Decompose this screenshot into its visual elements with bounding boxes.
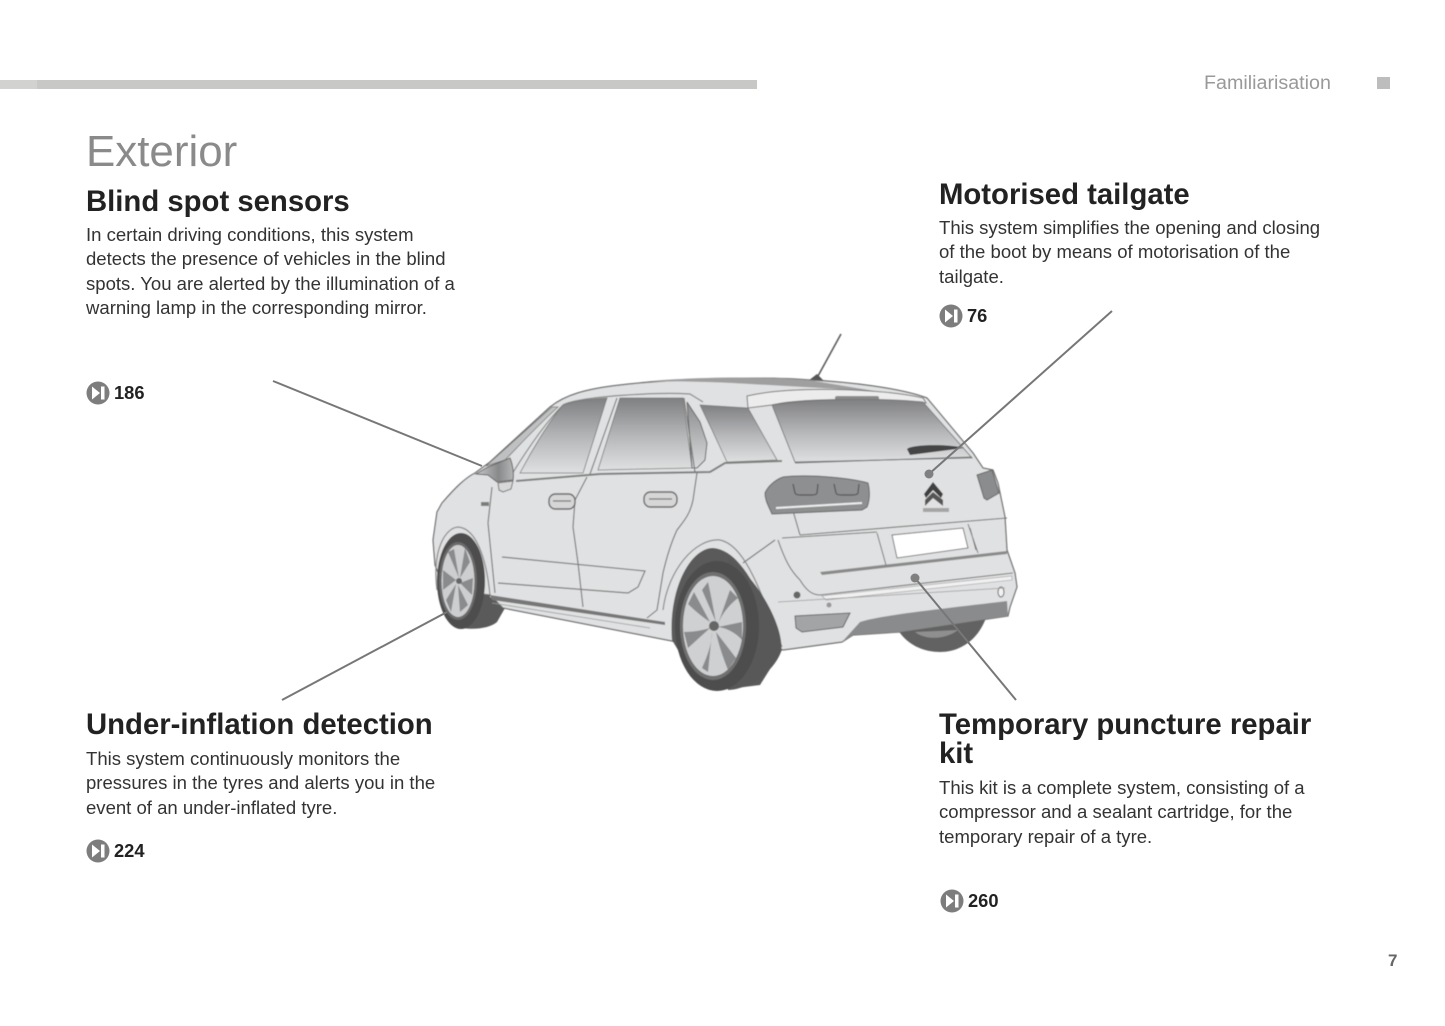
number plate	[892, 528, 968, 558]
text block: warning lamp in the corresponding mirror.	[86, 297, 427, 318]
text block	[939, 777, 1305, 847]
tailgate lines	[778, 457, 1013, 595]
front door window	[520, 398, 607, 473]
chrome strip	[820, 551, 1007, 575]
antenna	[818, 334, 841, 376]
text block: In certain driving conditions, this system	[86, 224, 414, 245]
text block: tailgate.	[939, 266, 1004, 287]
reflector	[795, 613, 850, 632]
sill strip	[490, 595, 665, 625]
far rear wheel	[898, 610, 988, 652]
car	[433, 334, 1017, 691]
heading: Motorised tailgate	[939, 178, 1190, 211]
citroen emblem	[924, 482, 943, 506]
text block: This system simplifies the opening and closing	[939, 217, 1320, 238]
belt line	[516, 461, 782, 481]
rear door window	[598, 398, 692, 470]
heading: Under-inflation detection	[86, 708, 433, 741]
page reference 76: 76	[967, 305, 987, 326]
panel: motorised tailgate	[939, 178, 1320, 328]
text block: detects the presence of vehicles in the blind	[86, 248, 446, 269]
panel: under-inflation detection	[86, 708, 435, 862]
rear tyre	[728, 558, 781, 690]
lower bumper	[842, 601, 1008, 642]
header bar	[0, 80, 757, 89]
bumper line	[778, 588, 1005, 602]
section label: Familiarisation	[1204, 72, 1331, 94]
roof highlight	[640, 378, 875, 391]
heading	[939, 708, 1311, 770]
left tail lamp	[765, 476, 869, 514]
right tail lamp	[977, 470, 999, 500]
page reference 224: 224	[114, 840, 145, 861]
car body	[433, 378, 1017, 650]
side rear window	[700, 405, 777, 462]
leader line: motorised tailgate	[924, 311, 1112, 478]
leader line: puncture repair kit	[910, 574, 1016, 700]
parking sensors	[794, 592, 800, 598]
spoiler	[747, 389, 926, 408]
door mirror	[476, 458, 513, 492]
text block: spots. You are alerted by the illumination of a	[86, 273, 455, 294]
page title: Exterior	[86, 127, 237, 176]
page reference 186	[86, 382, 145, 404]
door cuts	[488, 398, 775, 618]
door crease	[498, 557, 645, 593]
text block	[86, 748, 435, 818]
page reference 186: 186	[114, 382, 145, 403]
page reference 260	[940, 890, 999, 912]
page reference 224	[86, 840, 145, 862]
text block: This system continuously monitors the	[86, 748, 400, 769]
heading: Temporary puncture repair	[939, 708, 1311, 741]
front wheel rear tyre mass	[463, 535, 505, 629]
text block: pressures in the tyres and alerts you in the	[86, 772, 435, 793]
text block: This kit is a complete system, consisting of a	[939, 777, 1305, 798]
leader line: blind spot sensors	[273, 381, 482, 466]
page reference 76	[940, 304, 987, 328]
door handle rear	[644, 492, 677, 507]
wiper	[907, 445, 964, 455]
heading: Blind spot sensors	[86, 185, 350, 218]
leader line: under-inflation	[282, 612, 447, 700]
header square marker	[1377, 77, 1390, 89]
front wheel spokes	[443, 548, 473, 612]
rear window	[772, 399, 972, 462]
text block	[939, 217, 1320, 287]
front tyre	[437, 533, 485, 629]
brake light	[835, 396, 879, 401]
quarter window	[687, 402, 707, 468]
citroen wordmark	[923, 508, 949, 512]
text block: of the boot by means of motorisation of the	[939, 241, 1290, 262]
door handle front	[549, 494, 575, 509]
panel: temporary puncture repair kit	[939, 708, 1311, 912]
text block: compressor and a sealant cartridge, for the	[939, 801, 1292, 822]
side marker	[481, 502, 489, 506]
panel: blind spot sensors	[86, 185, 455, 404]
page reference 260: 260	[968, 890, 999, 911]
roof rail double line	[512, 393, 703, 474]
rear wheel spokes	[684, 582, 742, 672]
page number: 7	[1388, 951, 1397, 970]
text block: temporary repair of a tyre.	[939, 826, 1152, 847]
rear wheel arch	[672, 548, 782, 690]
front windshield sliver	[486, 407, 558, 466]
text block: event of an under-inflated tyre.	[86, 797, 337, 818]
text block	[86, 224, 455, 318]
heading: kit	[939, 737, 973, 770]
front wheel arch	[436, 527, 490, 595]
